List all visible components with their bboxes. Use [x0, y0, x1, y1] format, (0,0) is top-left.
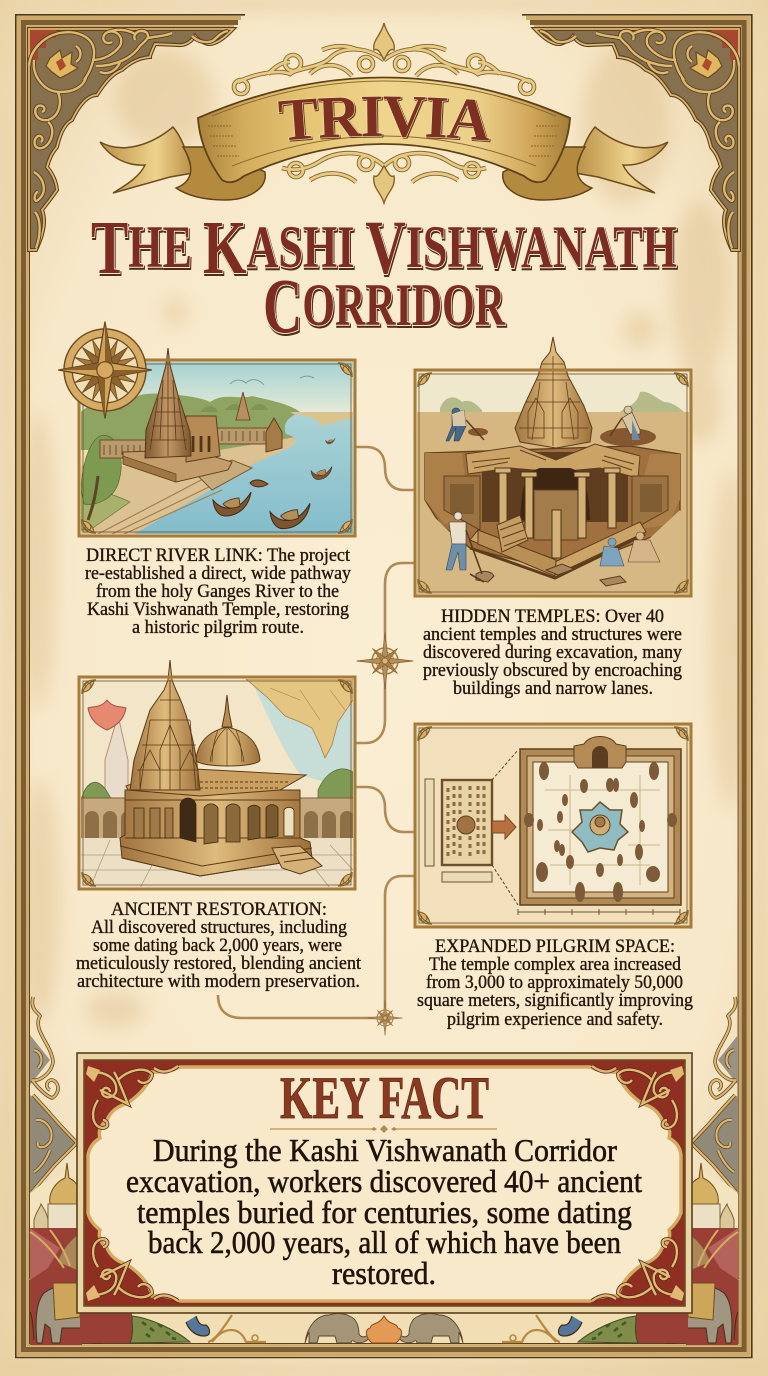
title line 1: ISHWANATH — [406, 214, 677, 280]
caption: ancient restoration: ANCIENT RESTORATION: — [111, 900, 327, 920]
pilgrims — [524, 762, 677, 902]
panel: key fact — [77, 1053, 692, 1313]
decorative divider — [270, 1125, 497, 1133]
key fact body: back 2,000 years, all of which have been — [148, 1224, 621, 1260]
key fact body: excavation, workers discovered 40+ ancient — [126, 1163, 642, 1199]
ribbon fold left — [176, 147, 265, 200]
title line 1: K — [203, 206, 247, 290]
icon: connector compass lower — [367, 1000, 403, 1036]
caption: direct river link: from the holy Ganges River to the — [96, 582, 339, 602]
corner ornament: top right — [535, 29, 739, 250]
key fact heading: KEY FACT — [280, 1065, 489, 1131]
caption: direct river link: DIRECT RIVER LINK: The project — [86, 546, 351, 566]
title line 1: HE — [128, 214, 203, 280]
bottom ornament: left — [30, 997, 106, 1345]
caption: hidden temples — [423, 607, 683, 699]
caption: hidden temples: HIDDEN TEMPLES: Over 40 — [441, 607, 664, 627]
caption: hidden temples: buildings and narrow lanes. — [453, 679, 653, 699]
caption: hidden temples: discovered during excavation, many — [423, 643, 683, 663]
icon: elephant left — [305, 1314, 372, 1344]
dome — [196, 727, 260, 766]
arrow: restoration to pilgrim space — [356, 787, 414, 832]
ribbon tail left — [100, 127, 193, 193]
caption: expanded pilgrim space — [417, 937, 693, 1030]
corner ornament: top left — [29, 29, 233, 250]
key fact body — [126, 1132, 642, 1291]
ruler — [425, 779, 434, 866]
icon: large compass rose — [58, 322, 152, 418]
caption: expanded pilgrim space: EXPANDED PILGRIM SPACE: — [435, 937, 675, 957]
title line 2: C — [263, 262, 302, 349]
temple building — [120, 768, 322, 876]
caption: hidden temples: previously obscured by encroaching — [423, 661, 682, 681]
ribbon fold right — [503, 147, 592, 200]
connectors — [218, 447, 414, 1018]
caption: direct river link: Kashi Vishwanath Temple, restoring — [87, 600, 349, 620]
caption: ancient restoration: meticulously restored, blending ancient — [76, 954, 362, 974]
caption: direct river link: a historic pilgrim route. — [132, 618, 304, 638]
ribbon heading: TRIVIA — [278, 96, 491, 142]
caption: direct river link — [85, 546, 352, 638]
arrow: hidden temples to restoration — [356, 563, 414, 743]
gate — [574, 736, 626, 768]
arrow: river link to hidden temples — [356, 447, 414, 490]
key fact corner scrollwork — [86, 1066, 684, 1301]
caption: ancient restoration: All discovered structures, including — [91, 918, 347, 938]
workers — [446, 406, 660, 582]
temple spire tall — [130, 660, 232, 790]
panel: hidden temples illustration — [415, 337, 691, 596]
caption: ancient restoration: architecture with modern preservation. — [77, 972, 360, 992]
bottom ornament: right — [662, 997, 738, 1345]
title — [91, 206, 677, 349]
ornament around ribbon — [234, 23, 534, 203]
icon: lotus — [366, 1316, 402, 1343]
key fact body: During the Kashi Vishwanath Corridor — [153, 1132, 617, 1168]
temple scene — [81, 679, 354, 888]
small scale ruler — [442, 872, 492, 882]
river scene — [81, 362, 353, 534]
scale bar — [518, 909, 680, 915]
title line 1: T — [91, 206, 128, 290]
fountain — [572, 802, 628, 852]
caption: direct river link: re-established a direct, wide pathway — [85, 564, 352, 584]
caption: ancient restoration — [76, 900, 362, 992]
caption: expanded pilgrim space: square meters, significantly improving — [417, 991, 693, 1011]
temple spire — [145, 348, 191, 458]
key fact body: temples buried for centuries, some dating — [137, 1194, 632, 1230]
panel: direct river link illustration — [79, 348, 355, 536]
title line 2: ORRIDOR — [302, 272, 505, 338]
panel: ancient restoration illustration — [79, 660, 355, 889]
arrow — [492, 815, 516, 839]
large plan — [520, 736, 681, 905]
caption: ancient restoration: some dating back 2,000 years, were — [93, 936, 342, 956]
icon: elephant right — [396, 1314, 463, 1344]
ribbon tail right — [575, 127, 668, 193]
caption: expanded pilgrim space: The temple complex area increased — [429, 955, 682, 975]
title line 1: ASHI — [247, 214, 365, 280]
bottom border strip — [80, 1313, 688, 1344]
caption: hidden temples: ancient temples and structures were — [423, 625, 682, 645]
temple dome — [515, 337, 592, 448]
arrow: pilgrim space to restoration caption — [218, 876, 414, 1018]
title line 1: V — [365, 206, 406, 290]
icon: connector compass upper — [357, 633, 413, 689]
panel: expanded pilgrim space illustration — [415, 724, 691, 927]
caption: expanded pilgrim space: pilgrim experience and safety. — [447, 1010, 663, 1030]
icon: lotus flower — [88, 700, 126, 730]
small plan — [442, 780, 492, 865]
ribbon main — [198, 78, 570, 182]
key fact body: restored. — [332, 1255, 436, 1291]
excavation scene — [417, 372, 689, 594]
title ribbon banner — [99, 22, 669, 206]
caption: expanded pilgrim space: from 3,000 to approximately 50,000 — [426, 973, 683, 993]
